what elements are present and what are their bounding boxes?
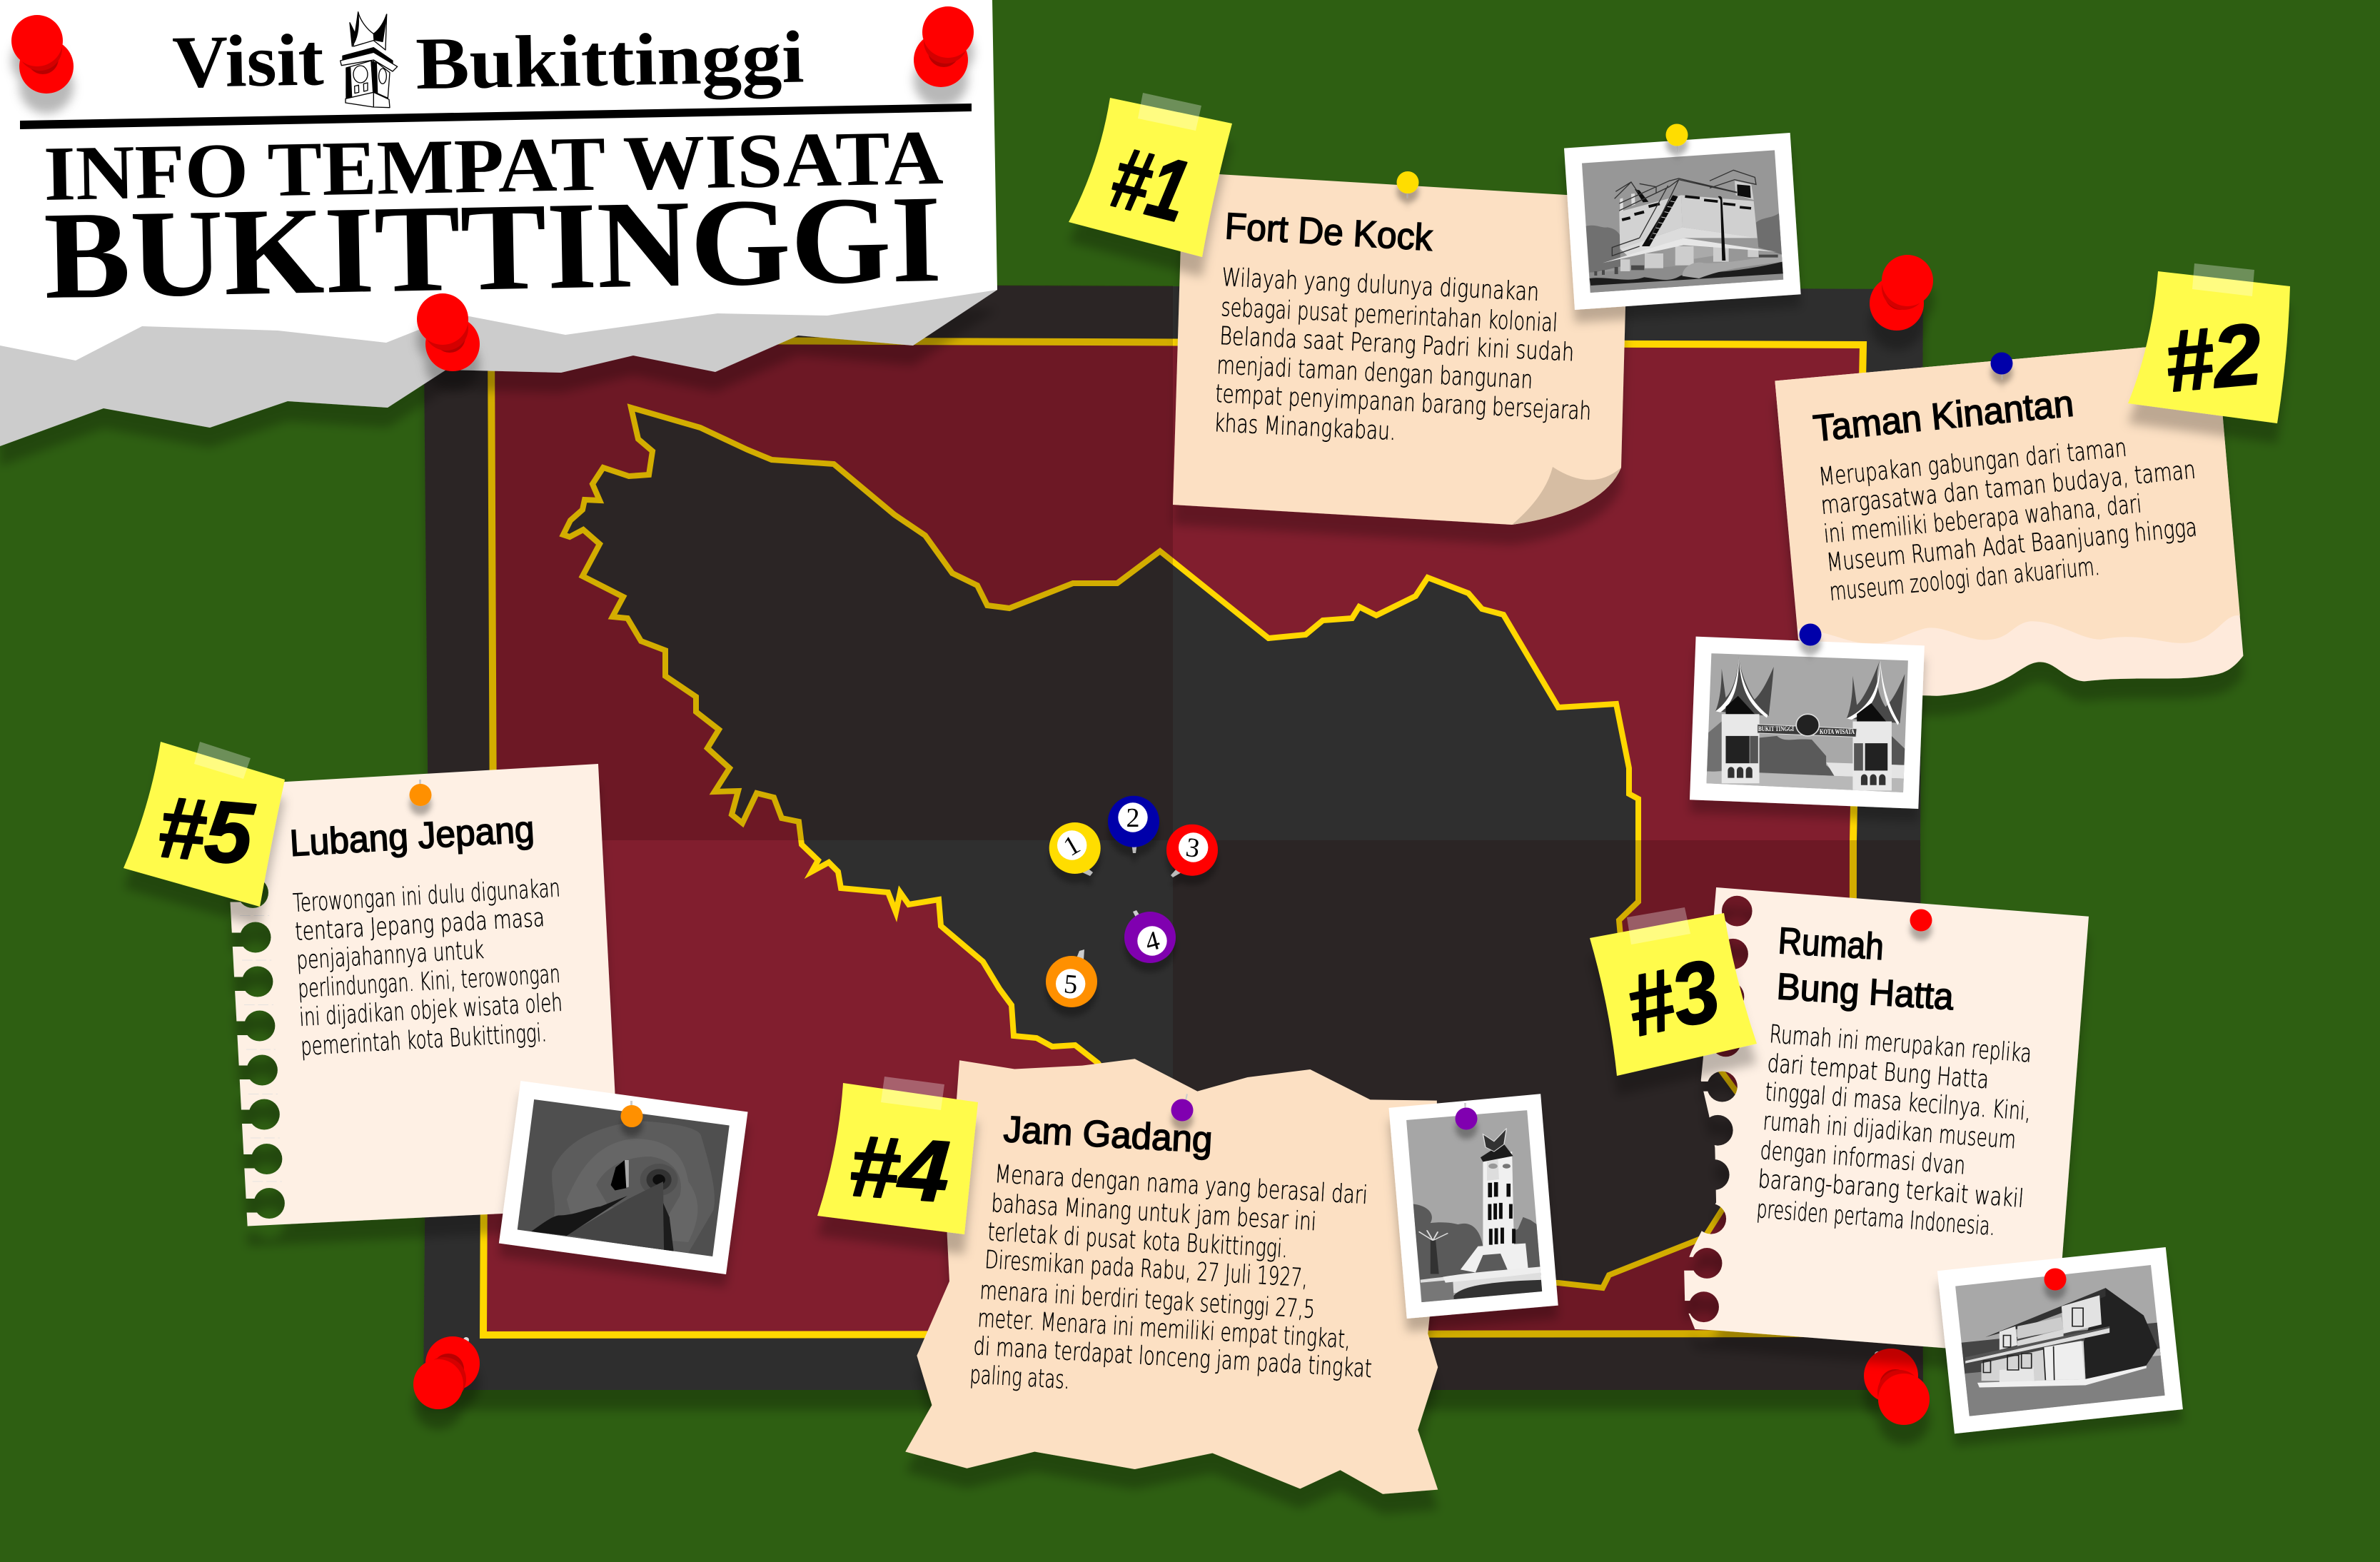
photo: Jam Gadang clock tower [1388,1094,1558,1319]
icon: red push pin, map top-right [1870,255,1933,331]
panel: note 4 Jam Gadang [817,1059,1558,1494]
text block: Rumah Bung Hatta description [1755,1020,2032,1241]
text block: Jam Gadang description: terletak di pusat kota Bukittinggi. [987,1218,1289,1264]
panel: note 3 Rumah Bung Hatta [1590,887,2183,1433]
map sheet [423,283,1923,1390]
heading: Fort De Kock: Fort De Kock [1224,206,1434,259]
icon: red push pin, title bottom [417,293,480,371]
left tower [1715,656,1774,716]
text block: Rumah Bung Hatta description: presiden pertama Indonesia. [1755,1195,1996,1241]
sticky note #1 [1069,93,1232,257]
icon: purple note pin [1171,1094,1194,1121]
pin 3 Rumah Bung Hatta: 3 [1184,832,1201,864]
photo: Taman Kinantan gate [1690,637,1925,809]
text block: Rumah Bung Hatta description: rumah ini dijadikan museum [1762,1107,2017,1155]
map: West Sumatra region outline [563,408,1750,1288]
pin 5 Lubang Jepang: 5 [1063,969,1079,1000]
panel: note 5 Lubang Jepang [123,742,748,1274]
torn notebook paper [1684,887,2089,1356]
text block: Lubang Jepang description [292,874,563,1062]
text block: Taman Kinantan description: margasatwa dan taman budaya, taman [1820,456,2197,520]
icon: purple photo pin [1455,1103,1478,1129]
heading: Taman Kinantan: Taman Kinantan [1812,383,2075,450]
sticky number #4: #4 [846,1117,952,1221]
pin 2 Taman Kinantan: 2 [1126,803,1139,833]
paper with wavy torn bottom [1775,341,2243,696]
torn paper face [0,0,997,361]
banner [1758,725,1857,737]
pin 1 Fort De Kock [1049,822,1101,876]
tape [194,742,251,779]
title rule [20,104,972,129]
heading: Rumah Bung Hatta: Bung Hatta [1775,966,1955,1018]
text block: Fort De Kock description [1214,263,1592,446]
text block: Jam Gadang description: Diresmikan pada Rabu, 27 Juli 1927, [984,1246,1309,1293]
gate banner text [1758,725,1855,735]
map inner frame [483,340,1863,1335]
text block: Rumah Bung Hatta description: dari tempat Bung Hatta [1766,1049,1990,1094]
sticky number #1: #1 [1101,128,1198,241]
heading: Bukittinggi: Bukittinggi [415,16,805,105]
text block: Jam Gadang description: Menara dengan nama yang berasal dari [994,1160,1368,1210]
text block: Jam Gadang description: di mana terdapat lonceng jam pada tingkat [972,1332,1373,1384]
pin 1 Fort De Kock: 1 [1059,830,1085,862]
pin 3 Rumah Bung Hatta [1166,825,1218,877]
icon: orange note pin [410,780,431,806]
icon: Jam Gadang clock tower logo [341,12,398,108]
text block: Lubang Jepang description: pemerintah kota Bukittinggi. [300,1019,548,1062]
torn paper fold [0,214,997,446]
right tower [1847,660,1905,723]
panel: note 1 Fort De Kock [1069,93,1801,525]
gate banner text: KOTA WISATA [1820,728,1855,735]
text block: Fort De Kock description: tempat penyimpanan barang bersejarah [1215,380,1592,426]
icon: red push pin, map bottom-right [1864,1349,1930,1425]
heading: Jam Gadang: Jam Gadang [1002,1109,1214,1161]
text block: Rumah Bung Hatta description: tinggal di masa kecilnya. Kini, [1764,1078,2032,1127]
title: Bukittinggi: BUKITTINGGI [43,169,942,325]
paper with curled corner [1173,172,1625,525]
tape [1627,907,1690,944]
text block: Fort De Kock description: sebagai pusat pemerintahan kolonial [1221,293,1558,338]
fold shading: upper-left quadrant [423,283,1173,840]
panel: folded map [423,283,1923,1390]
heading: Rumah Bung Hatta [1775,920,1955,1018]
sticky number #5: #5 [154,778,258,883]
tape [881,1077,944,1110]
text block: Fort De Kock description: Wilayah yang dulunya digunakan [1221,263,1540,307]
icon: blue photo pin [1799,624,1822,651]
tape [2192,263,2254,296]
icon: orange photo pin [621,1101,642,1127]
photo: Fort De Kock [1564,133,1801,310]
text block: Taman Kinantan description: Museum Rumah Adat Baanjuang hingga [1825,513,2198,578]
sticky note #3 [1590,907,1757,1076]
heading: Lubang Jepang: Lubang Jepang [288,809,535,865]
text block: Lubang Jepang description: penjajahannya untuk [296,936,485,975]
fold shading: lower-right quadrant [1173,840,1923,1390]
icon: yellow photo pin [1666,124,1688,151]
text block: Rumah Bung Hatta description: dengan informasi dvan [1759,1137,1967,1181]
pin 4 Jam Gadang [1124,910,1176,963]
text block: Jam Gadang description: bahasa Minang untuk jam besar ini [990,1189,1317,1236]
icon: red push pin, title left [11,15,74,94]
text block: Taman Kinantan description: museum zoologi dan akuarium. [1828,553,2101,607]
panel: note 2 Taman Kinantan [1690,263,2290,809]
text block: Lubang Jepang description: tentara Jepang pada masa [294,904,545,947]
torn paper [905,1059,1438,1494]
sticky number #3: #3 [1618,941,1728,1055]
icon: blue note pin [1990,353,2013,380]
text block: Fort De Kock description: khas Minangkabau. [1214,409,1396,446]
text block: Taman Kinantan description [1817,434,2198,607]
icon: red note pin [1910,910,1932,931]
title: Info Tempat Wisata: INFO TEMPAT WISATA [43,114,944,217]
text block: Lubang Jepang description: ini dijadikan objek wisata oleh [298,989,563,1032]
text block: Taman Kinantan description: Merupakan gabungan dari taman [1817,434,2128,492]
photo: Lubang Jepang tunnel [499,1081,748,1274]
text block: Jam Gadang description: paling atas. [969,1361,1071,1395]
icon: yellow note pin [1396,171,1419,198]
tape [1138,93,1201,131]
sticky number #2: #2 [2161,305,2265,410]
text block: Rumah Bung Hatta description: Rumah ini merupakan replika [1768,1020,2032,1069]
notebook paper with ring holes [224,764,621,1226]
text block: Jam Gadang description [969,1160,1373,1395]
sticky note #4 [817,1077,978,1234]
gate banner text: BUKIT TINGGI [1758,725,1794,732]
icon: red photo pin [2044,1268,2066,1291]
pin 5 Lubang Jepang [1046,949,1097,1007]
heading: Visit: Visit [171,19,325,104]
photo: Rumah Bung Hatta house [1937,1247,2183,1433]
text block: Taman Kinantan description: ini memiliki beberapa wahana, dari [1822,490,2143,549]
icon: red push pin, map bottom-left [413,1336,480,1409]
heading: Rumah Bung Hatta: Rumah [1777,920,1885,968]
panel: torn title paper [0,0,997,446]
pin 2 Taman Kinantan [1108,796,1159,853]
map location pins [1046,796,1218,1007]
pin 4 Jam Gadang: 4 [1142,925,1163,958]
sticky note #5 [123,742,285,907]
icon: red push pin, title right [914,6,974,87]
text block: Lubang Jepang description: perlindungan. Kini, terowongan [297,960,561,1004]
sticky note #2 [2128,263,2290,423]
text block: Fort De Kock description: Belanda saat Perang Padri kini sudah [1219,322,1575,367]
text block: Jam Gadang description: menara ini berdiri tegak setinggi 27,5 [979,1276,1316,1324]
text block: Lubang Jepang description: Terowongan ini dulu digunakan [292,874,561,918]
text block: Fort De Kock description: menjadi taman dengan bangunan [1216,351,1533,395]
text block: Jam Gadang description: meter. Menara ini memiliki empat tingkat, [977,1304,1351,1354]
text block: Rumah Bung Hatta description: barang-barang terkait wakil [1757,1165,2024,1214]
